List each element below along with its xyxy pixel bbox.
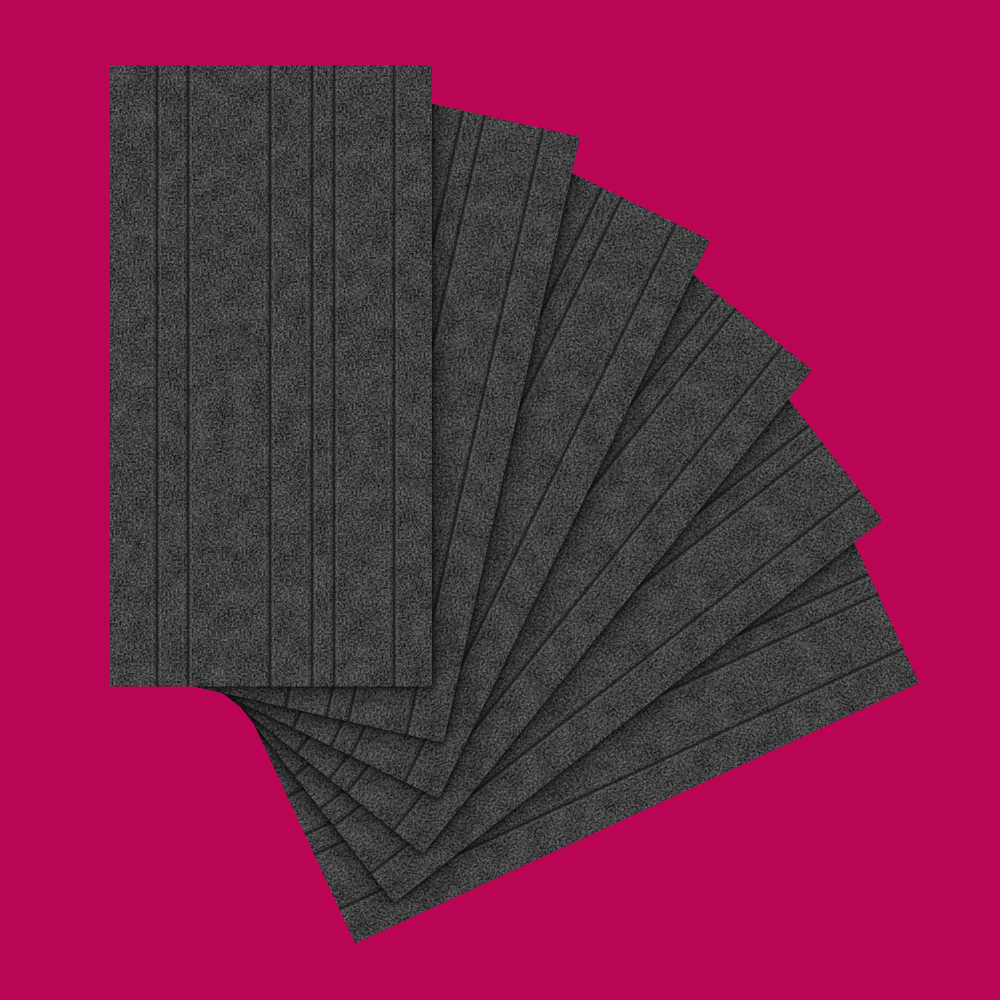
panel 6: bottom of the fan bbox=[220, 391, 919, 943]
panel stack bbox=[110, 66, 919, 943]
panel 4 bbox=[172, 168, 812, 854]
panel 3 bbox=[149, 99, 710, 799]
panel 2 bbox=[129, 66, 580, 743]
panel 1: front upright panel bbox=[110, 66, 432, 686]
illustration: fan of grooved felt panels bbox=[110, 66, 919, 944]
panel 5 bbox=[196, 267, 883, 903]
